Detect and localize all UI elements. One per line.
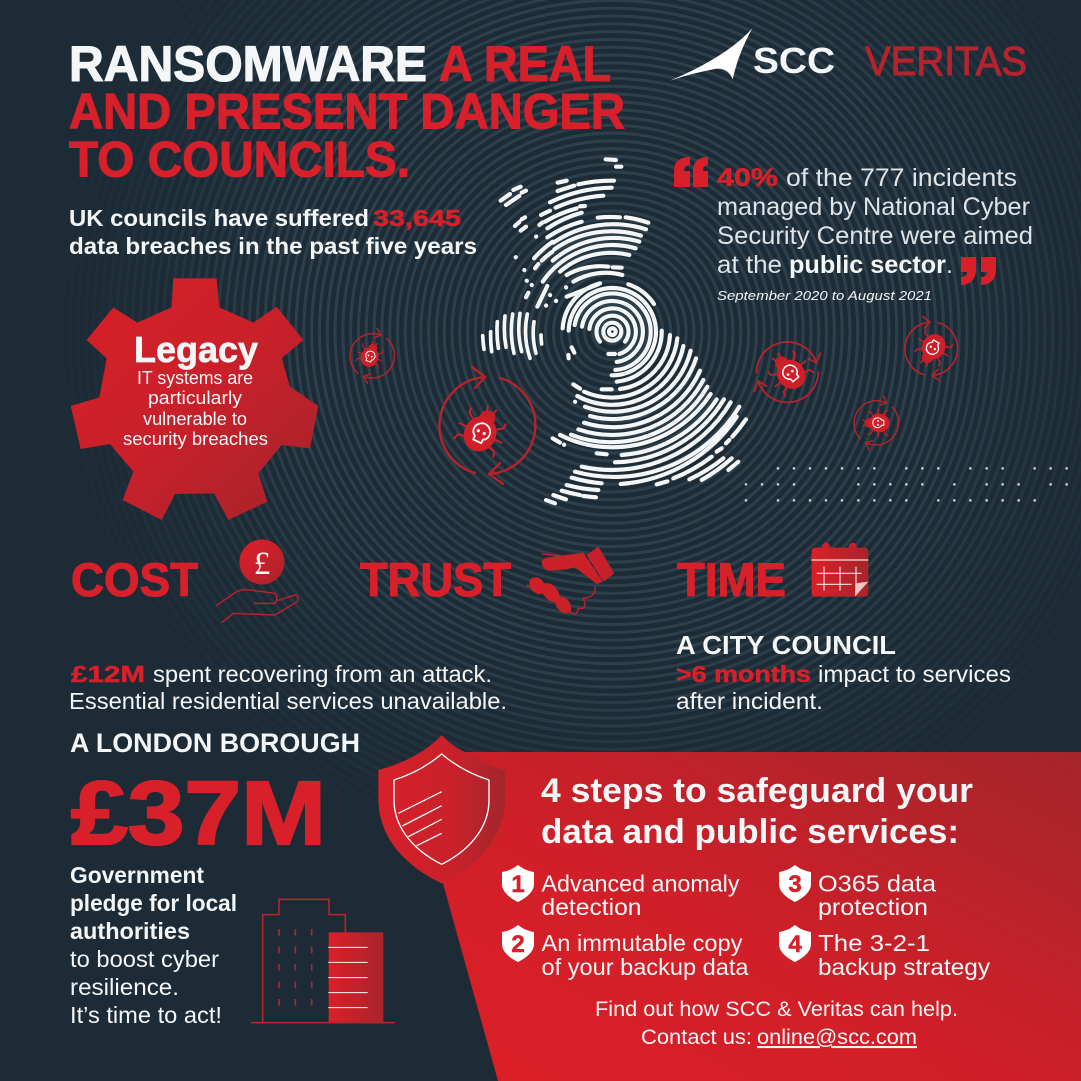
title: AND PRESENT DANGER [69,84,625,140]
icon: bug right three [844,389,909,457]
icon: bug small left [341,322,404,390]
logo: SCC: SCC [753,40,835,81]
icon: pound coin and hand [216,540,298,623]
step 3: 3 [788,871,802,898]
text: city council [676,630,1011,714]
text: London borough: pledge for local [70,890,237,916]
text: cost detail: £12M [71,661,145,687]
heading: cost: COST [71,553,198,606]
quote: 40% of incidents: of the 777 incidents [786,164,1017,192]
text: London borough: A LONDON BOROUGH [70,728,360,758]
text: London borough: It’s time to act! [70,1002,222,1028]
text: London borough: Government [70,862,204,888]
step 1 [502,865,740,920]
panel: 4 steps: data and public services: [541,813,959,851]
text: London borough: £37M [71,764,326,864]
subtitle: data breaches: data breaches in the past five years [69,233,477,259]
icon: bug right two [905,317,958,381]
quote: 40% of incidents: September 2020 to August 2021 [717,288,932,303]
icon: pound coin and hand: £ [254,546,270,582]
title: RANSOMWARE [69,36,427,92]
icon: large shield [378,735,505,883]
icon: bug right one [744,333,831,411]
step 4: The 3-2-1 [818,930,930,956]
quote: 40% of incidents: at the [717,251,782,279]
quote: 40% of incidents: 40% [717,164,778,192]
icon: building [251,899,395,1023]
quote: 40% of incidents: managed by National Cyber [717,193,1030,221]
heading: 4 steps: 4 steps to safeguard your [541,772,973,810]
text: city council: after incident. [676,688,823,714]
icon: handshake [526,547,614,616]
logo: SCC [670,28,835,81]
UK fingerprint map [483,159,746,503]
logo: Veritas: VERITAS [865,38,1027,84]
icon: opening quote mark [674,157,708,187]
subtitle: data breaches [69,205,477,259]
text: London borough: resilience. [70,974,179,1000]
heading: trust: TRUST [360,553,511,606]
step 3: O365 data [818,870,936,896]
step 1: 1 [511,871,525,898]
step 4: backup strategy [818,954,991,980]
step 2: of your backup data [542,954,749,980]
panel: 4 steps [378,735,1081,1081]
decorative dot grid [745,467,1068,502]
text: city council: A CITY COUNCIL [676,630,896,660]
subtitle: data breaches: UK councils have suffered [69,205,369,231]
icon: calendar [811,543,868,597]
text: London borough: authorities [70,918,190,944]
gear: legacy systems: IT systems are [137,368,253,388]
title [69,36,625,188]
step 1: Advanced anomaly [542,870,740,896]
icon: bug large [439,367,535,484]
text: London borough [70,728,360,1028]
text: cost detail: spent recovering from an attack. [153,661,492,687]
quote: 40% of incidents [674,157,1033,303]
subtitle: data breaches: 33,645 [373,205,461,231]
quote: 40% of incidents: . [946,251,953,279]
icon: closing quote mark [961,257,996,285]
step 4: 4 [788,931,802,958]
step 3: protection [818,894,928,920]
call to action: Find out how SCC & Veritas can help. [595,998,958,1021]
step 2: An immutable copy [542,930,743,956]
text: city council: >6 months [676,661,811,687]
gear: legacy systems: Legacy [134,329,258,370]
call to action: online@scc.com [757,1026,917,1049]
quote: 40% of incidents: Security Centre were aimed [717,222,1033,250]
gear: legacy systems [71,278,318,520]
step 2 [502,925,749,980]
gear: legacy systems: security breaches [123,429,268,449]
step 2: 2 [511,931,525,958]
text: London borough: to boost cyber [70,946,219,972]
call to action [595,998,958,1049]
text: city council: impact to services [818,661,1011,687]
gear: legacy systems: particularly [148,388,242,408]
title: A REAL [439,36,611,92]
heading: time: TIME [677,553,786,606]
step 3 [779,865,936,920]
title: TO COUNCILS. [69,132,410,188]
step 1: detection [542,894,642,920]
text: cost detail [69,661,507,714]
text: cost detail: Essential residential services unavailable. [69,688,507,714]
quote: 40% of incidents: public sector [789,251,946,279]
gear: legacy systems: vulnerable to [143,409,247,429]
step 4 [779,925,991,980]
call to action: Contact us: [641,1026,752,1049]
